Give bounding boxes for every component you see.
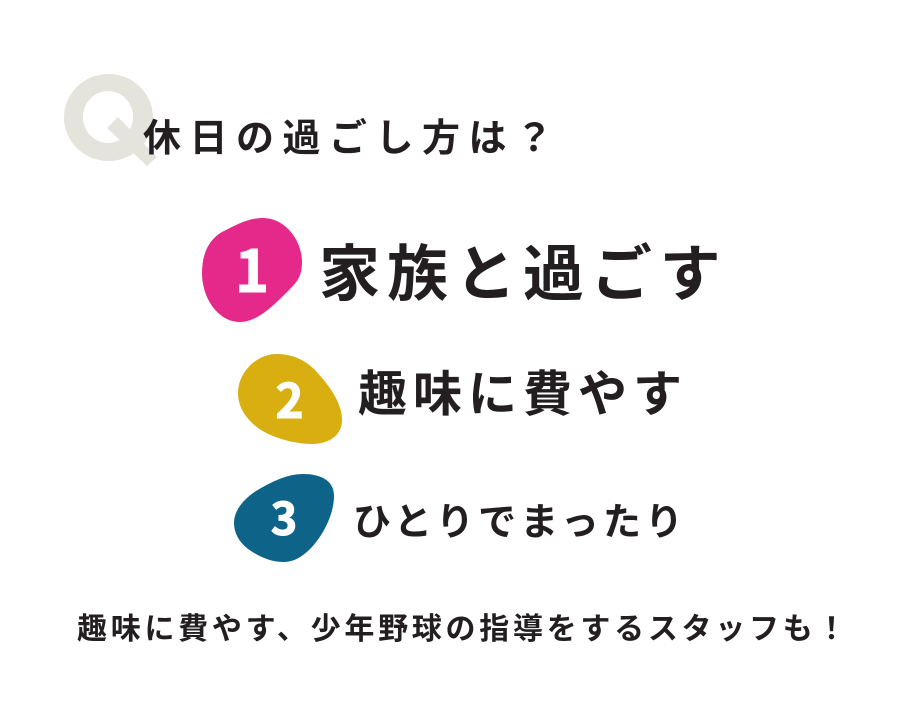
decorative letter Q: Q: [59, 31, 153, 185]
decorative letter Q: [64, 74, 157, 166]
question heading: 休日の過ごし方は？: [143, 118, 562, 160]
rank 3 answer: ひとりでまったり: [353, 502, 687, 544]
rank 2 blob and number: 2: [275, 362, 304, 432]
rank 3 blob and number: 3: [271, 483, 297, 548]
rank 1 answer: 家族と過ごす: [319, 240, 728, 308]
rank 2 answer: 趣味に費やす: [358, 368, 688, 422]
footnote: 趣味に費やす、少年野球の指導をするスタッフも！: [77, 613, 850, 646]
rank 1 blob and number: 1: [235, 225, 269, 309]
